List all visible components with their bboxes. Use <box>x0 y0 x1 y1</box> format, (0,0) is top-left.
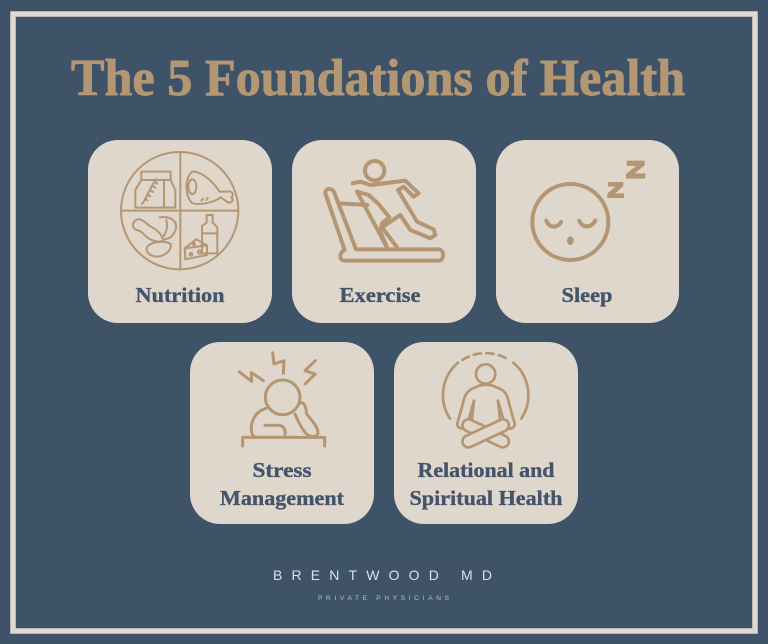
label: Relational and <box>418 458 555 482</box>
title: The 5 Foundations of Health <box>71 50 685 107</box>
panel: exercise <box>292 140 476 323</box>
icon: sleeping face <box>532 161 645 260</box>
label: Nutrition <box>136 283 225 307</box>
panel: sleep <box>496 140 679 323</box>
panel: nutrition <box>88 140 272 323</box>
label <box>410 458 563 510</box>
logo wordmark: BRENTWOOD MD <box>273 567 492 583</box>
icon: meditating person <box>443 353 528 449</box>
icon: stressed person at desk <box>239 353 325 446</box>
icon: runner on treadmill <box>325 161 443 261</box>
label: Management <box>220 486 344 510</box>
panel: relational and spiritual health <box>394 342 578 524</box>
label <box>220 458 344 510</box>
label: Stress <box>252 458 312 482</box>
label: Sleep <box>562 283 612 307</box>
panel: stress management <box>190 342 374 524</box>
logo wordmark <box>273 567 492 602</box>
logo wordmark: PRIVATE PHYSICIANS <box>318 595 450 602</box>
label: Spiritual Health <box>410 486 563 510</box>
icon: plate with food <box>121 152 238 269</box>
label: Exercise <box>340 283 420 307</box>
